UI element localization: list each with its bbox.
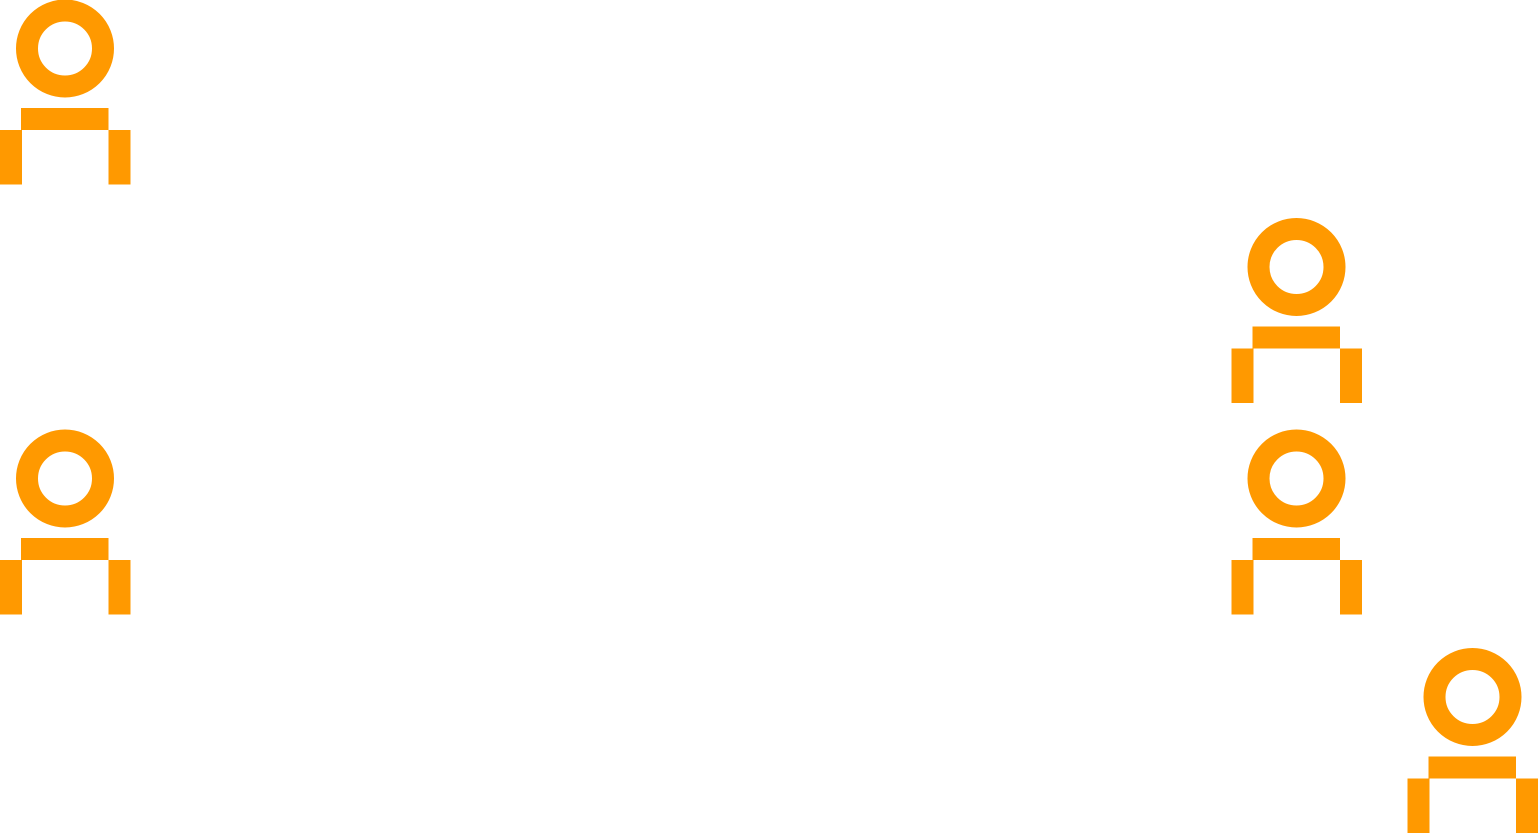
icon: person right upper [1232, 229, 1362, 403]
icon: person top-left [0, 10, 130, 184]
icon: person bottom-right [1408, 659, 1538, 833]
icon: person left middle [0, 440, 130, 614]
icon: person right middle [1232, 440, 1362, 614]
